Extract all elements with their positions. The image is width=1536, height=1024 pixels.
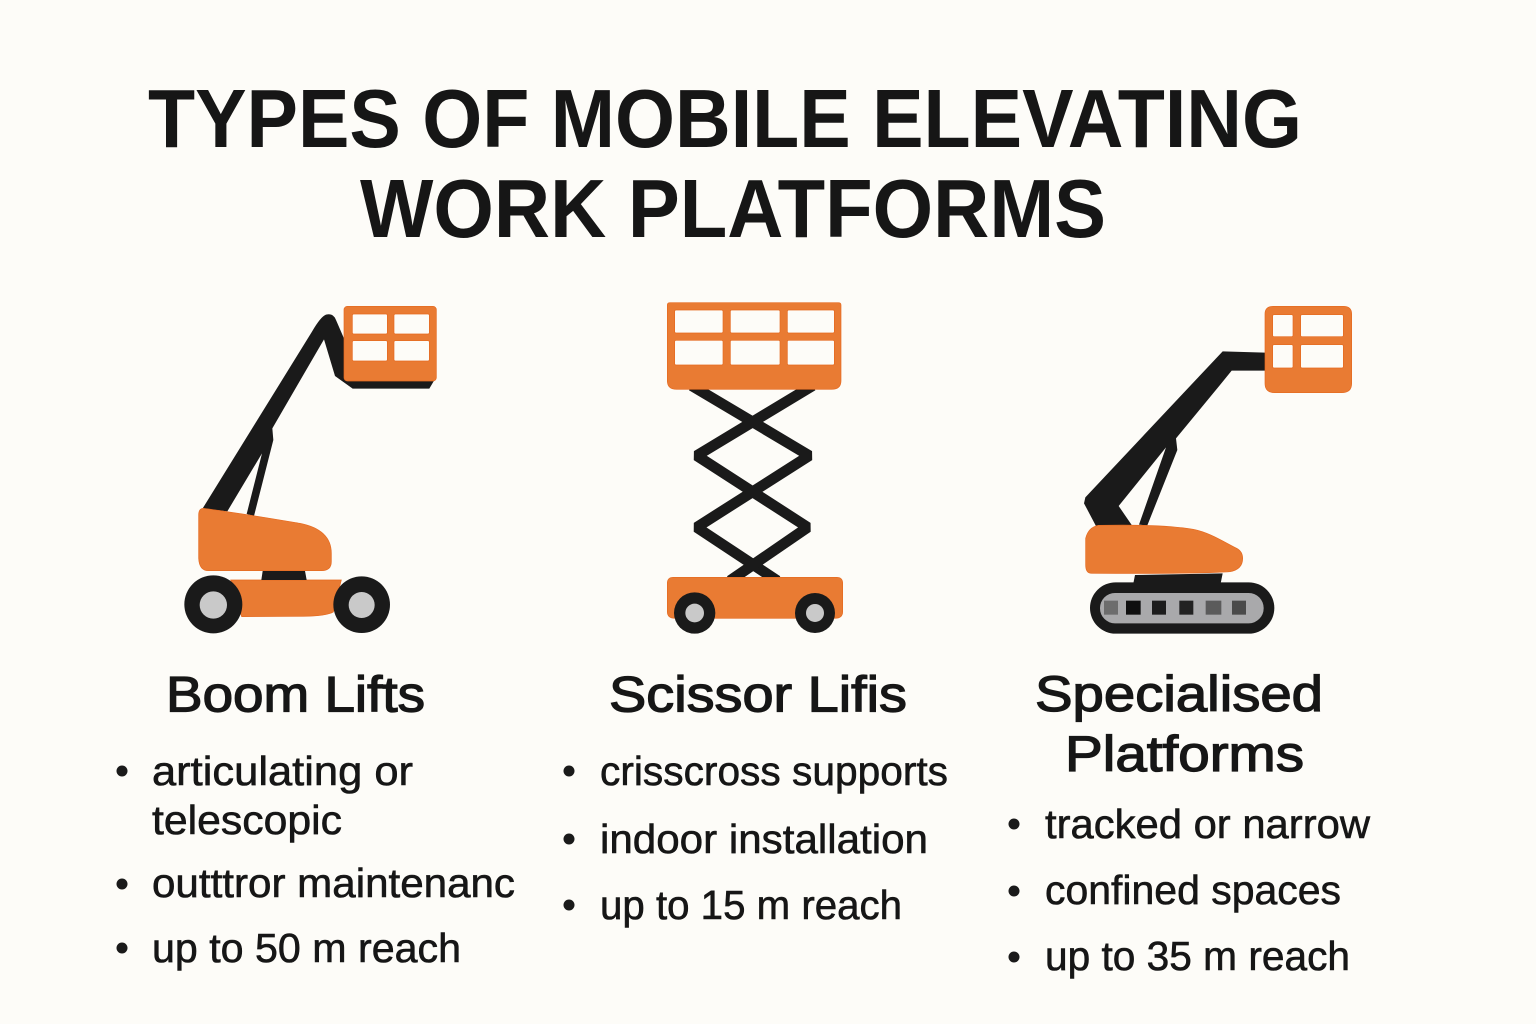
chassis — [231, 580, 341, 617]
bullet list: boom lifts: up to 50 m reach — [152, 925, 461, 971]
icon: scissor lift — [667, 303, 843, 634]
platform — [667, 303, 841, 389]
bullet list: scissor lifts — [564, 748, 948, 928]
heading: Specialised Platforms: Platforms — [1065, 726, 1304, 782]
basket — [1265, 306, 1352, 393]
bullet list: specialised platforms — [1008, 801, 1370, 979]
icon: boom lift — [184, 306, 436, 633]
heading: Specialised Platforms — [1035, 666, 1323, 782]
scissor arms — [692, 386, 813, 581]
body — [199, 508, 331, 571]
icon: tracked specialised platform — [1084, 306, 1352, 634]
boom arm — [203, 314, 436, 516]
wheels — [674, 592, 835, 634]
heading: Scissor Lifis: Scissor Lifis — [609, 666, 907, 722]
bullet list: boom lifts: telescopic — [152, 797, 342, 843]
crawler track — [1090, 582, 1274, 634]
heading: Boom Lifts: Boom Lifts — [166, 666, 425, 722]
bullet list: scissor lifts: indoor installation — [600, 816, 928, 862]
bullet list: specialised platforms: up to 35 m reach — [1045, 933, 1350, 979]
bullet list: scissor lifts: up to 15 m reach — [600, 882, 902, 928]
bullet list: specialised platforms: tracked or narrow — [1045, 801, 1370, 847]
title: TYPES OF MOBILE ELEVATING — [148, 72, 1302, 165]
bullet list: boom lifts: outttror maintenanc — [152, 860, 515, 906]
bullet list: specialised platforms: confined spaces — [1045, 867, 1341, 913]
title: WORK PLATFORMS — [360, 162, 1106, 255]
bullet list: boom lifts: articulating or — [152, 748, 413, 794]
turntable — [1133, 573, 1223, 583]
heading: Specialised Platforms: Specialised — [1035, 666, 1323, 722]
body — [1086, 525, 1243, 573]
basket — [344, 306, 436, 381]
turntable — [261, 571, 307, 580]
bullet list: boom lifts — [116, 748, 515, 971]
base — [667, 577, 843, 618]
bullet list: scissor lifts: crisscross supports — [600, 748, 948, 794]
wheels — [184, 575, 390, 633]
title — [148, 72, 1302, 255]
boom arm — [1084, 351, 1265, 527]
